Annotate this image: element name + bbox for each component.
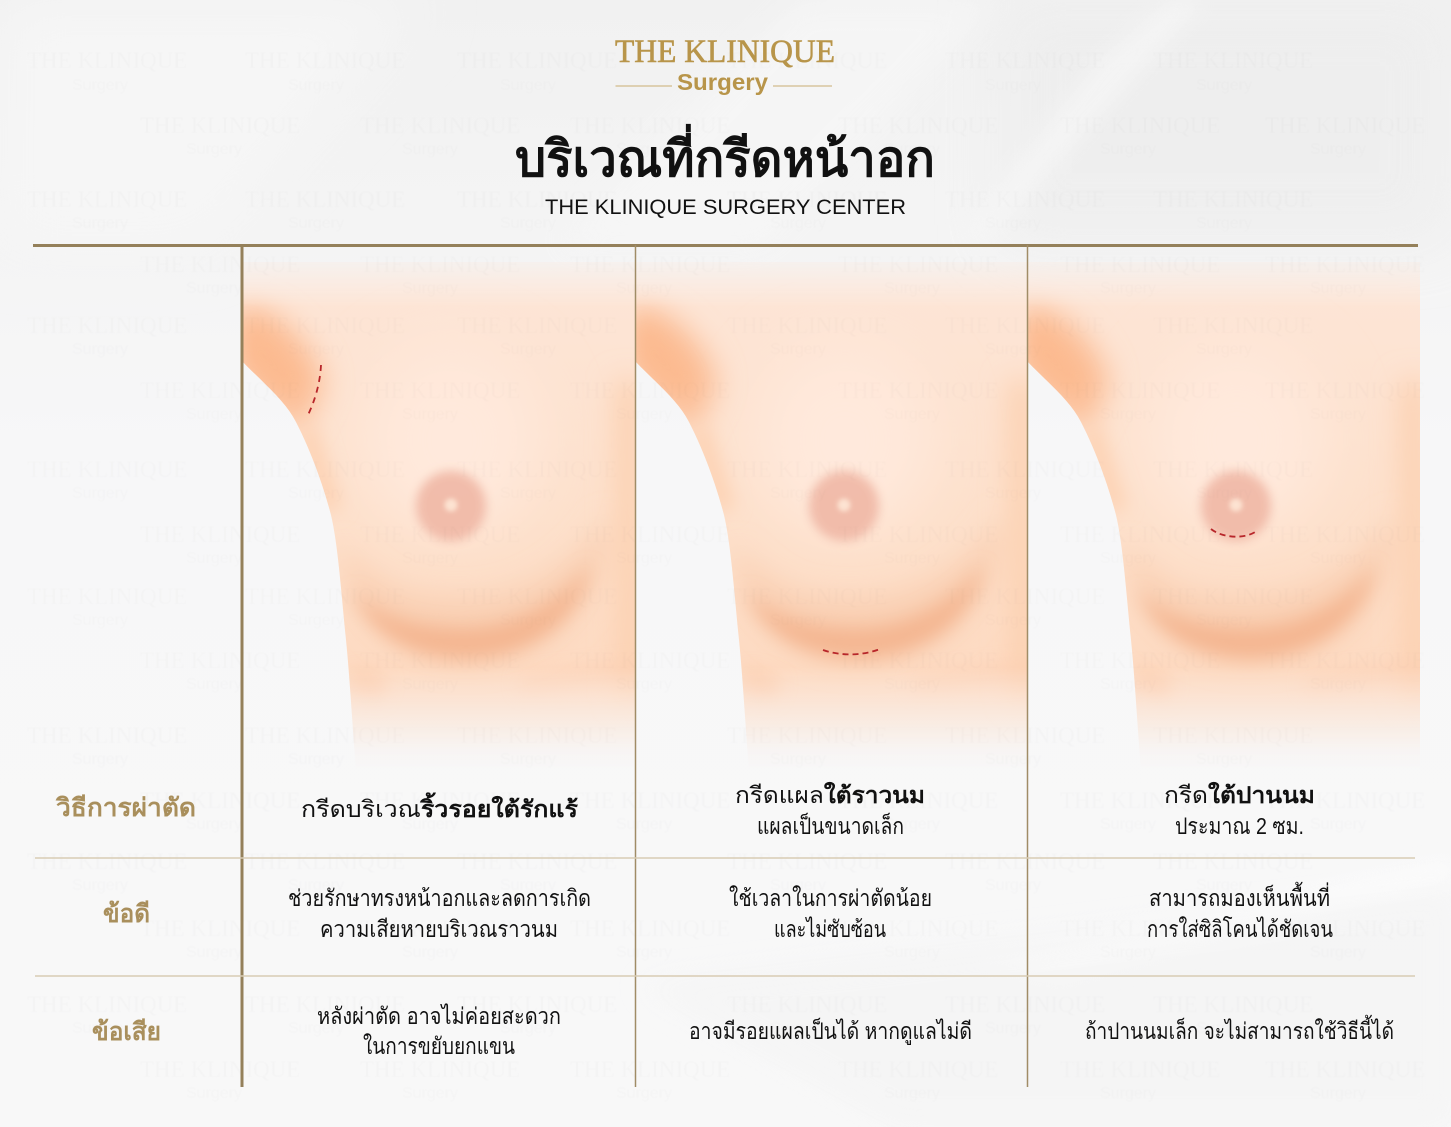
watermark pattern: Surgery — [500, 1020, 556, 1037]
advantage: under fold: และไม่ซับซ้อน — [774, 916, 886, 942]
watermark pattern: THE KLINIQUE — [457, 992, 617, 1017]
watermark pattern: Surgery — [1310, 141, 1366, 158]
watermark pattern: THE KLINIQUE — [360, 252, 520, 277]
watermark pattern: Surgery — [500, 341, 556, 358]
watermark pattern: THE KLINIQUE — [945, 457, 1105, 482]
watermark pattern: Surgery — [770, 1020, 826, 1037]
panel: periareolar incision illustration — [1020, 250, 1428, 780]
watermark pattern: THE KLINIQUE — [945, 313, 1105, 338]
watermark pattern: THE KLINIQUE — [360, 522, 520, 547]
advantage: under areola: การใส่ซิลิโคนได้ชัดเจน — [1147, 916, 1333, 942]
watermark pattern: Surgery — [72, 341, 128, 358]
watermark pattern: Surgery — [288, 485, 344, 502]
disadvantage: armpit: ในการขยับยกแขน — [363, 1033, 515, 1059]
watermark pattern: Surgery — [186, 141, 242, 158]
watermark pattern: Surgery — [402, 550, 458, 567]
watermark pattern: Surgery — [985, 215, 1041, 232]
watermark pattern: THE KLINIQUE — [27, 187, 187, 212]
watermark pattern: Surgery — [186, 406, 242, 423]
watermark pattern: THE KLINIQUE — [1265, 522, 1425, 547]
watermark pattern: THE KLINIQUE — [570, 252, 730, 277]
watermark pattern: Surgery — [985, 751, 1041, 768]
method: armpit: กรีดบริเวณ ริ้วรอยใต้รักแร้ — [301, 792, 579, 822]
watermark pattern: THE KLINIQUE — [140, 916, 300, 941]
row label: surgical method: วิธีการผ่าตัด — [55, 794, 196, 822]
watermark pattern: Surgery — [1196, 341, 1252, 358]
row label: advantages: ข้อดี — [103, 900, 150, 928]
watermark pattern: Surgery — [770, 485, 826, 502]
logo — [615, 34, 835, 95]
watermark pattern: Surgery — [500, 77, 556, 94]
watermark pattern: THE KLINIQUE — [838, 648, 998, 673]
watermark pattern: Surgery — [770, 751, 826, 768]
watermark pattern: THE KLINIQUE — [1060, 1057, 1220, 1082]
watermark pattern: THE KLINIQUE — [1153, 723, 1313, 748]
watermark pattern: THE KLINIQUE — [1060, 522, 1220, 547]
watermark pattern: Surgery — [402, 1085, 458, 1102]
watermark pattern: Surgery — [186, 676, 242, 693]
watermark pattern: THE KLINIQUE — [945, 584, 1105, 609]
watermark pattern: THE KLINIQUE — [727, 313, 887, 338]
watermark pattern: THE KLINIQUE — [245, 723, 405, 748]
watermark pattern: THE KLINIQUE — [457, 457, 617, 482]
watermark pattern: Surgery — [1310, 550, 1366, 567]
method: under fold: กรีดแผลใต้ราวนม — [735, 781, 925, 808]
watermark pattern: Surgery — [1100, 816, 1156, 833]
watermark pattern: Surgery — [985, 612, 1041, 629]
watermark pattern: THE KLINIQUE — [1265, 788, 1425, 813]
watermark pattern: Surgery — [288, 215, 344, 232]
watermark pattern: THE KLINIQUE — [727, 457, 887, 482]
watermark pattern: THE KLINIQUE — [457, 849, 617, 874]
watermark pattern: THE KLINIQUE — [1153, 584, 1313, 609]
advantage: armpit — [288, 885, 591, 942]
watermark pattern: THE KLINIQUE — [570, 1057, 730, 1082]
watermark pattern: Surgery — [1100, 550, 1156, 567]
method: under areola: กรีดใต้ปานนม — [1164, 781, 1315, 808]
watermark pattern: Surgery — [186, 944, 242, 961]
watermark pattern: Surgery — [616, 676, 672, 693]
watermark pattern: THE KLINIQUE — [27, 849, 187, 874]
watermark pattern: THE KLINIQUE — [1060, 252, 1220, 277]
watermark pattern: Surgery — [288, 341, 344, 358]
watermark pattern: Surgery — [1310, 676, 1366, 693]
watermark pattern: THE KLINIQUE — [360, 916, 520, 941]
watermark pattern: THE KLINIQUE — [838, 1057, 998, 1082]
watermark pattern: Surgery — [884, 550, 940, 567]
watermark pattern: Surgery — [985, 485, 1041, 502]
watermark pattern: THE KLINIQUE — [457, 313, 617, 338]
watermark pattern: THE KLINIQUE — [838, 378, 998, 403]
watermark pattern: Surgery — [288, 1020, 344, 1037]
watermark pattern: Surgery — [500, 215, 556, 232]
watermark pattern: THE KLINIQUE — [1153, 849, 1313, 874]
watermark pattern: Surgery — [770, 877, 826, 894]
watermark pattern: THE KLINIQUE — [727, 48, 887, 73]
watermark pattern: Surgery — [402, 944, 458, 961]
panel: inframammary incision illustration — [628, 250, 1036, 780]
watermark pattern: Surgery — [1100, 280, 1156, 297]
watermark pattern: THE KLINIQUE — [1265, 252, 1425, 277]
watermark pattern: Surgery — [1100, 1085, 1156, 1102]
watermark pattern: THE KLINIQUE — [945, 849, 1105, 874]
watermark pattern: THE KLINIQUE — [245, 849, 405, 874]
watermark pattern: Surgery — [770, 341, 826, 358]
watermark pattern: THE KLINIQUE — [1153, 457, 1313, 482]
watermark pattern: THE KLINIQUE — [245, 187, 405, 212]
watermark pattern: THE KLINIQUE — [360, 1057, 520, 1082]
watermark pattern: Surgery — [884, 141, 940, 158]
watermark pattern: THE KLINIQUE — [727, 187, 887, 212]
watermark pattern: THE KLINIQUE — [945, 992, 1105, 1017]
watermark pattern: Surgery — [985, 1020, 1041, 1037]
watermark pattern: THE KLINIQUE — [838, 522, 998, 547]
watermark pattern: THE KLINIQUE — [360, 378, 520, 403]
title: บริเวณที่กรีดหน้าอก — [515, 124, 935, 187]
watermark pattern: THE KLINIQUE — [727, 723, 887, 748]
watermark pattern: Surgery — [402, 280, 458, 297]
watermark pattern: THE KLINIQUE — [1153, 48, 1313, 73]
watermark pattern: Surgery — [72, 485, 128, 502]
watermark pattern: THE KLINIQUE — [1153, 187, 1313, 212]
watermark pattern: Surgery — [1196, 1020, 1252, 1037]
watermark pattern: Surgery — [500, 485, 556, 502]
watermark pattern: Surgery — [1196, 612, 1252, 629]
watermark pattern: THE KLINIQUE — [140, 788, 300, 813]
watermark pattern: THE KLINIQUE — [457, 187, 617, 212]
watermark pattern: THE KLINIQUE — [570, 648, 730, 673]
watermark pattern: THE KLINIQUE — [570, 113, 730, 138]
watermark pattern: Surgery — [616, 816, 672, 833]
watermark pattern: THE KLINIQUE — [360, 788, 520, 813]
watermark pattern: THE KLINIQUE — [245, 457, 405, 482]
watermark pattern: Surgery — [985, 77, 1041, 94]
watermark pattern: THE KLINIQUE — [27, 584, 187, 609]
watermark pattern: Surgery — [616, 550, 672, 567]
watermark pattern: Surgery — [72, 612, 128, 629]
watermark pattern: Surgery — [1196, 77, 1252, 94]
watermark pattern: Surgery — [616, 406, 672, 423]
watermark pattern: THE KLINIQUE — [1060, 916, 1220, 941]
watermark pattern: Surgery — [770, 215, 826, 232]
watermark pattern: THE KLINIQUE — [838, 916, 998, 941]
watermark pattern: THE KLINIQUE — [945, 723, 1105, 748]
watermark pattern: THE KLINIQUE — [1265, 648, 1425, 673]
watermark pattern: THE KLINIQUE — [570, 916, 730, 941]
watermark pattern: THE KLINIQUE — [1265, 916, 1425, 941]
watermark pattern: THE KLINIQUE — [245, 584, 405, 609]
watermark pattern: Surgery — [616, 1085, 672, 1102]
watermark pattern: Surgery — [884, 280, 940, 297]
watermark pattern: THE KLINIQUE — [1153, 313, 1313, 338]
watermark pattern: THE KLINIQUE — [457, 584, 617, 609]
watermark pattern: THE KLINIQUE — [27, 992, 187, 1017]
watermark pattern: Surgery — [884, 944, 940, 961]
table grid lines — [33, 245, 1418, 1087]
watermark pattern: THE KLINIQUE — [1265, 378, 1425, 403]
method: under areola — [1164, 781, 1315, 839]
watermark pattern: Surgery — [884, 1085, 940, 1102]
watermark pattern: Surgery — [616, 280, 672, 297]
watermark pattern: Surgery — [985, 341, 1041, 358]
watermark pattern: Surgery — [288, 612, 344, 629]
watermark pattern: THE KLINIQUE — [457, 48, 617, 73]
watermark pattern: Surgery — [884, 816, 940, 833]
watermark pattern: Surgery — [186, 816, 242, 833]
watermark pattern: THE KLINIQUE — [838, 113, 998, 138]
method: under fold: แผลเป็นขนาดเล็ก — [757, 811, 904, 839]
watermark pattern: Surgery — [1310, 944, 1366, 961]
watermark pattern: THE KLINIQUE — [1060, 648, 1220, 673]
watermark pattern: THE KLINIQUE — [245, 992, 405, 1017]
watermark pattern: Surgery — [616, 141, 672, 158]
watermark pattern: Surgery — [884, 406, 940, 423]
watermark pattern: THE KLINIQUE — [570, 788, 730, 813]
watermark pattern: Surgery — [402, 141, 458, 158]
watermark pattern: Surgery — [616, 944, 672, 961]
watermark pattern: Surgery — [288, 751, 344, 768]
advantage: under areola: สามารถมองเห็นพื้นที่ — [1149, 882, 1330, 911]
watermark pattern: THE KLINIQUE — [27, 313, 187, 338]
watermark pattern: Surgery — [72, 215, 128, 232]
watermark pattern: THE KLINIQUE — [1060, 788, 1220, 813]
watermark pattern: THE KLINIQUE — [1060, 378, 1220, 403]
watermark pattern: Surgery — [186, 280, 242, 297]
watermark pattern: Surgery — [72, 877, 128, 894]
disadvantage: armpit — [317, 1003, 561, 1059]
watermark pattern: THE KLINIQUE — [1265, 113, 1425, 138]
watermark pattern: THE KLINIQUE — [570, 378, 730, 403]
watermark pattern: Surgery — [1196, 751, 1252, 768]
watermark pattern: THE KLINIQUE — [140, 648, 300, 673]
watermark pattern: THE KLINIQUE — [1265, 1057, 1425, 1082]
logo: Surgery — [677, 69, 768, 95]
incision: under areola — [1211, 529, 1258, 537]
watermark pattern: Surgery — [884, 676, 940, 693]
watermark pattern: Surgery — [985, 877, 1041, 894]
watermark pattern: Surgery — [288, 77, 344, 94]
watermark pattern: Surgery — [288, 877, 344, 894]
watermark pattern: THE KLINIQUE — [27, 48, 187, 73]
subtitle: THE KLINIQUE SURGERY CENTER — [545, 196, 906, 219]
watermark pattern: THE KLINIQUE — [838, 788, 998, 813]
watermark pattern: THE KLINIQUE — [27, 457, 187, 482]
method: under areola: ประมาณ 2 ซม. — [1175, 813, 1304, 839]
disadvantage: under fold: อาจมีรอยแผลเป็นได้ หากดูแลไม่ดี — [689, 1016, 972, 1045]
watermark pattern: Surgery — [72, 1020, 128, 1037]
logo: THE KLINIQUE — [615, 34, 835, 70]
watermark pattern: Surgery — [500, 877, 556, 894]
watermark pattern: Surgery — [1310, 1085, 1366, 1102]
watermark pattern: Surgery — [402, 406, 458, 423]
watermark pattern: THE KLINIQUE — [1153, 992, 1313, 1017]
watermark pattern: THE KLINIQUE — [838, 252, 998, 277]
watermark pattern: Surgery — [1310, 406, 1366, 423]
watermark pattern: THE KLINIQUE — [1060, 113, 1220, 138]
watermark pattern: THE KLINIQUE — [140, 1057, 300, 1082]
advantage: under fold — [729, 885, 932, 942]
watermark pattern: Surgery — [1100, 406, 1156, 423]
watermark pattern: THE KLINIQUE — [945, 187, 1105, 212]
row label: disadvantages: ข้อเสีย — [92, 1018, 161, 1046]
watermark pattern: Surgery — [500, 751, 556, 768]
watermark pattern: Surgery — [1196, 485, 1252, 502]
watermark pattern: Surgery — [72, 77, 128, 94]
watermark pattern: Surgery — [1196, 215, 1252, 232]
watermark pattern: Surgery — [1100, 944, 1156, 961]
method: under fold — [735, 781, 925, 839]
watermark pattern: THE KLINIQUE — [27, 723, 187, 748]
watermark pattern: Surgery — [1100, 141, 1156, 158]
disadvantage: under areola: ถ้าปานนมเล็ก จะไม่สามารถใช้วิธีนี้ได้ — [1085, 1015, 1394, 1044]
watermark pattern: THE KLINIQUE — [245, 48, 405, 73]
watermark pattern: Surgery — [1100, 676, 1156, 693]
watermark pattern: Surgery — [1310, 816, 1366, 833]
watermark pattern: THE KLINIQUE — [140, 252, 300, 277]
watermark pattern: Surgery — [770, 612, 826, 629]
watermark pattern: THE KLINIQUE — [245, 313, 405, 338]
watermark pattern: THE KLINIQUE — [727, 992, 887, 1017]
watermark pattern: THE KLINIQUE — [140, 378, 300, 403]
incision: under breast fold — [823, 649, 880, 654]
watermark pattern: THE KLINIQUE — [140, 522, 300, 547]
incision: armpit crease — [307, 365, 321, 417]
advantage: under areola — [1147, 882, 1333, 942]
watermark pattern: THE KLINIQUE — [360, 648, 520, 673]
watermark pattern: Surgery — [1310, 280, 1366, 297]
watermark pattern: THE KLINIQUE — [360, 113, 520, 138]
watermark pattern: Surgery — [186, 550, 242, 567]
watermark pattern: THE KLINIQUE — [457, 723, 617, 748]
watermark pattern: Surgery — [402, 676, 458, 693]
watermark pattern: Surgery — [500, 612, 556, 629]
watermark pattern: THE KLINIQUE — [727, 849, 887, 874]
watermark pattern: THE KLINIQUE — [945, 48, 1105, 73]
watermark pattern: Surgery — [1196, 877, 1252, 894]
disadvantage: armpit: หลังผ่าตัด อาจไม่ค่อยสะดวก — [317, 1003, 561, 1029]
watermark pattern: THE KLINIQUE — [570, 522, 730, 547]
panel: armpit incision illustration — [235, 250, 643, 780]
watermark pattern: THE KLINIQUE — [140, 113, 300, 138]
advantage: armpit: ช่วยรักษาทรงหน้าอกและลดการเกิด — [288, 885, 591, 911]
watermark pattern: Surgery — [72, 751, 128, 768]
advantage: armpit: ความเสียหายบริเวณราวนม — [320, 916, 558, 942]
watermark pattern: Surgery — [186, 1085, 242, 1102]
watermark pattern: Surgery — [402, 816, 458, 833]
watermark pattern: THE KLINIQUE — [727, 584, 887, 609]
advantage: under fold: ใช้เวลาในการผ่าตัดน้อย — [729, 885, 932, 911]
